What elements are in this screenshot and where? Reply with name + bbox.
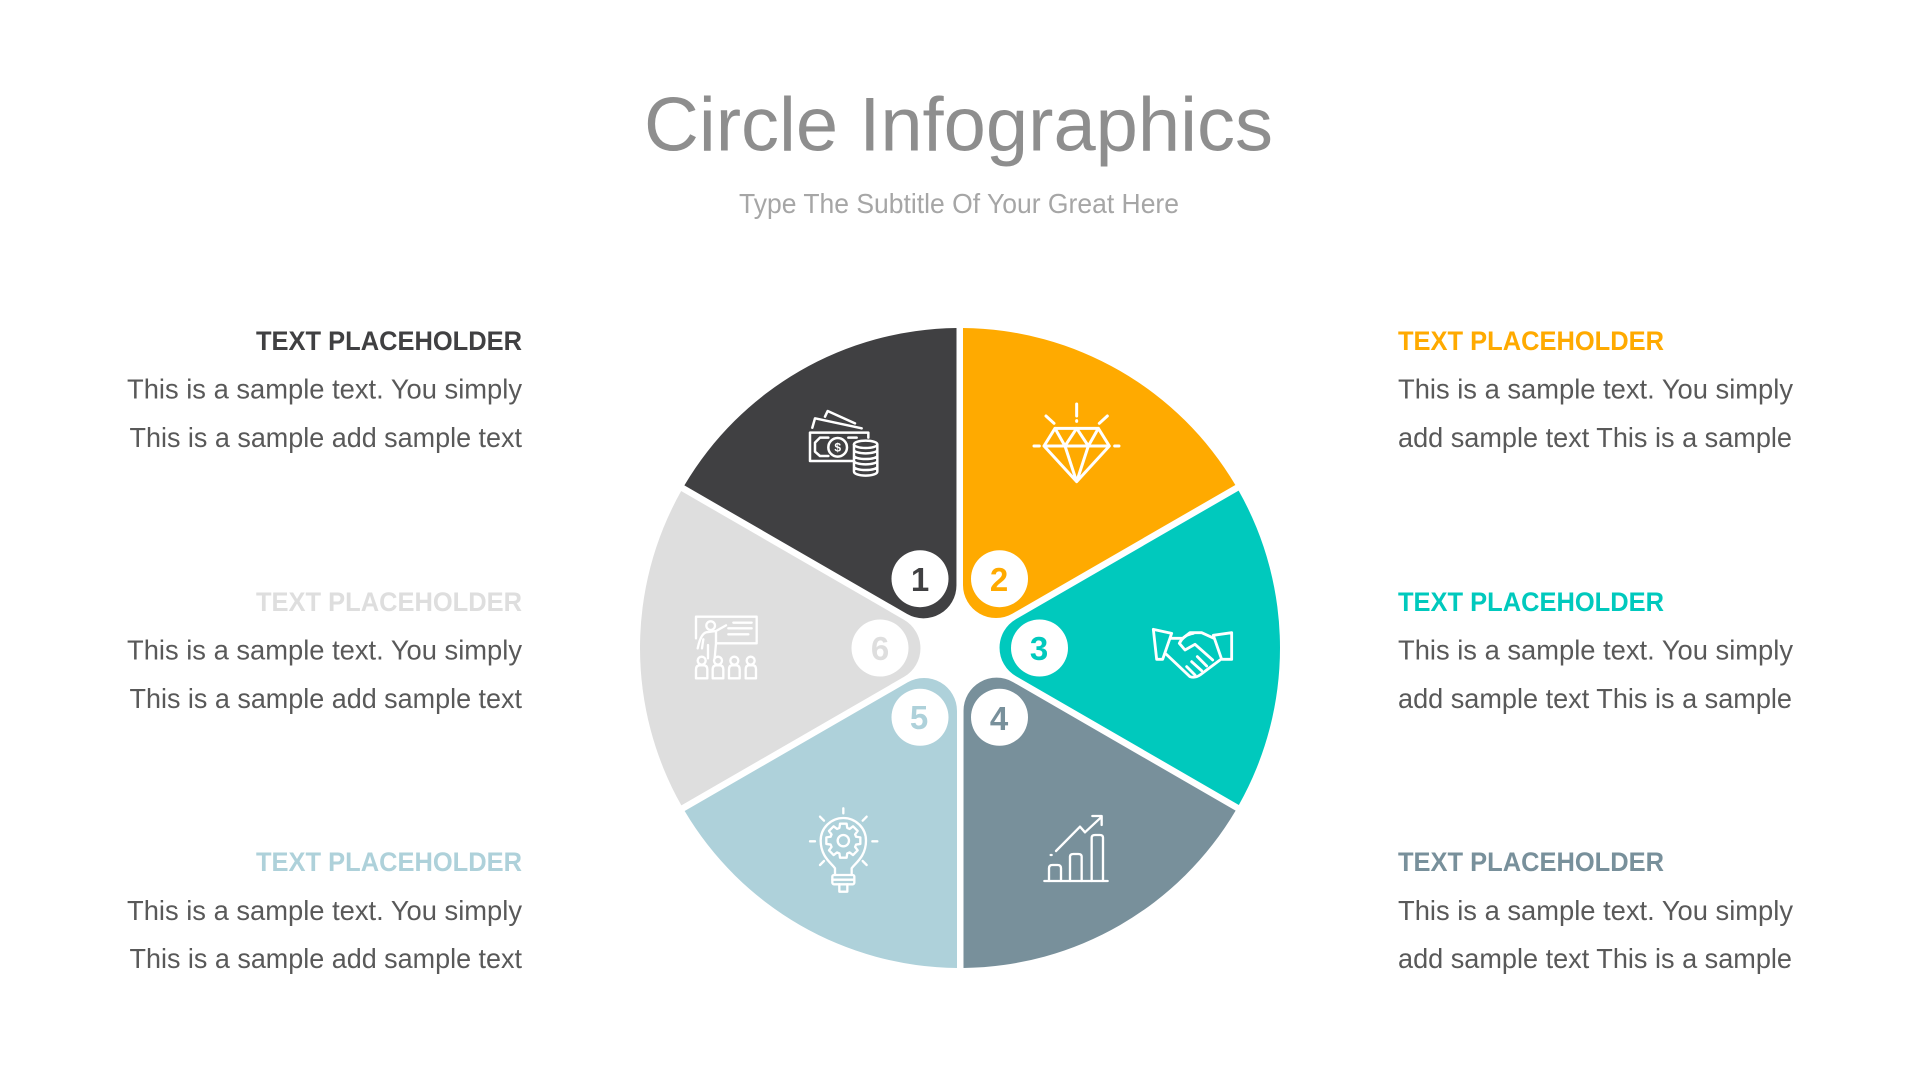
icon: presenter and audience [696, 617, 757, 678]
number badge 5 [892, 689, 948, 746]
number badge 1: 1 [911, 561, 929, 598]
number badge 4 [971, 689, 1028, 746]
icon: handshake [1153, 629, 1232, 677]
heading: item 6: TEXT PLACEHOLDER [256, 587, 522, 617]
body: item 3: add sample text This is a sample [1398, 683, 1792, 714]
number badge 4: 4 [990, 700, 1009, 737]
number badge 6 [852, 620, 908, 676]
number badge 2 [971, 550, 1028, 607]
heading: item 5: TEXT PLACEHOLDER [256, 847, 522, 877]
number badge 3: 3 [1030, 630, 1048, 667]
text block: item 4 [1398, 847, 1793, 974]
text block: item 5 [127, 847, 522, 974]
body: item 2: This is a sample text. You simply [1398, 374, 1793, 404]
body: item 3 [1398, 634, 1793, 714]
body: item 4: This is a sample text. You simply [1398, 895, 1793, 926]
number badge 1 [892, 550, 948, 607]
heading: item 3: TEXT PLACEHOLDER [1398, 587, 1664, 617]
subtitle: Type The Subtitle Of Your Great Here [739, 188, 1179, 219]
number badge 6: 6 [871, 630, 889, 667]
text block: item 2 [1398, 326, 1793, 453]
icon: money and coins [810, 411, 877, 476]
number badge 5: 5 [910, 699, 928, 736]
segment 6: light gray [545, 425, 933, 805]
body: item 4: add sample text This is a sample [1398, 943, 1792, 974]
pie chart [545, 250, 1375, 1046]
body: item 5 [127, 895, 522, 974]
segment 4: slate [848, 666, 1236, 1046]
number badge 2: 2 [990, 561, 1008, 598]
text block: item 6 [127, 587, 522, 714]
segment 1: charcoal [684, 250, 1072, 630]
body: item 3: This is a sample text. You simply [1398, 634, 1793, 666]
text block: item 3 [1398, 587, 1793, 714]
number badge 3 [1011, 620, 1068, 676]
heading: item 1: TEXT PLACEHOLDER [256, 326, 522, 356]
body: item 1 [127, 374, 522, 453]
text block: item 1 [127, 326, 522, 453]
icon: diamond [1034, 404, 1119, 482]
segment 3: teal [987, 491, 1375, 871]
heading: item 2: TEXT PLACEHOLDER [1398, 326, 1664, 356]
body: item 4 [1398, 895, 1793, 974]
title: Circle Infographics [644, 82, 1273, 168]
heading: item 4: TEXT PLACEHOLDER [1398, 847, 1664, 877]
body: item 2 [1398, 374, 1793, 453]
body: item 2: add sample text This is a sample [1398, 422, 1792, 453]
body: item 1: This is a sample add sample text [130, 422, 522, 453]
segment 5: light blue [685, 678, 957, 968]
body: item 1: This is a sample text. You simply [127, 374, 522, 404]
icon: money and coins: $ [834, 441, 841, 455]
icon: light bulb with gear [810, 808, 877, 892]
body: item 5: This is a sample add sample text [130, 943, 522, 974]
body: item 6 [127, 634, 522, 714]
body: item 5: This is a sample text. You simply [127, 895, 522, 926]
body: item 6: This is a sample text. You simply [127, 634, 522, 666]
body: item 6: This is a sample add sample text [130, 683, 522, 714]
segment 2: orange [963, 328, 1235, 618]
icon: growth bar chart [1044, 816, 1108, 881]
